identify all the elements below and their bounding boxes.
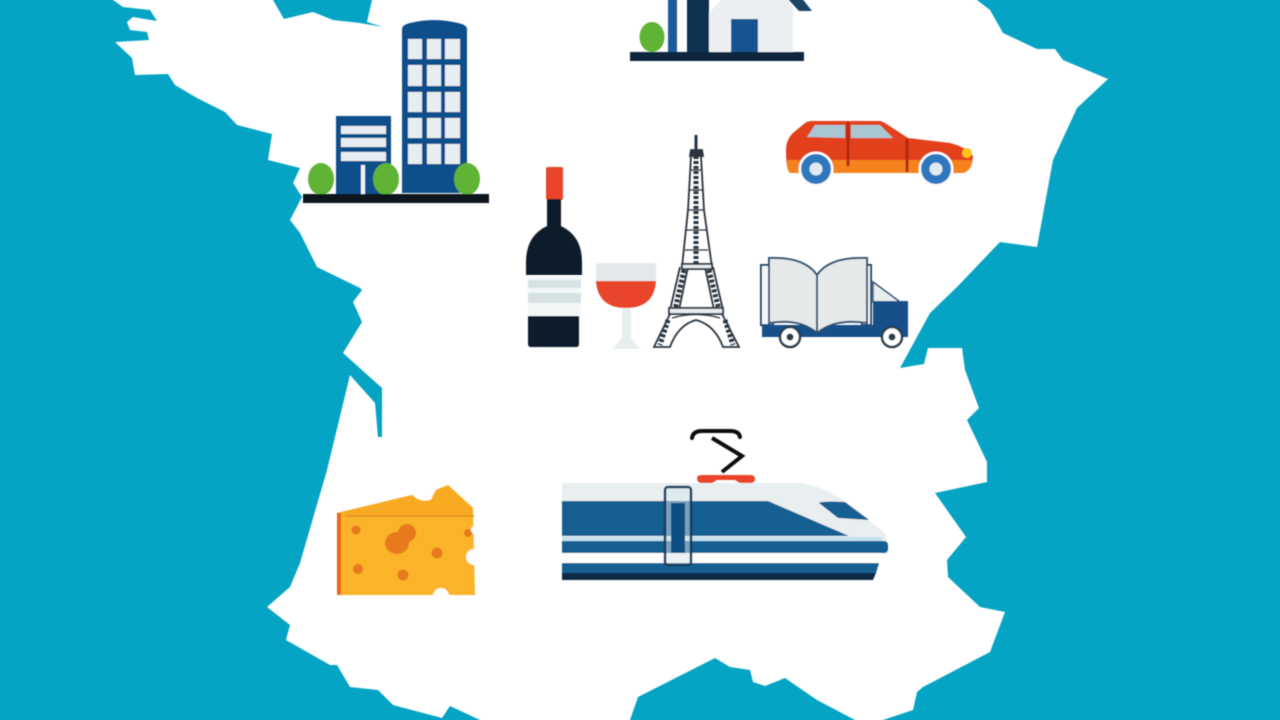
tall tower	[402, 20, 467, 193]
icon: red car	[786, 121, 973, 186]
icon: wine bottle	[526, 167, 582, 347]
icon: office buildings	[303, 20, 489, 203]
short building	[336, 116, 391, 194]
pantograph	[692, 431, 755, 483]
icon: wine glass	[596, 263, 656, 349]
icon: high-speed train	[562, 431, 888, 580]
trees	[308, 163, 480, 195]
icon: book truck	[761, 258, 908, 347]
ground	[303, 194, 489, 203]
icon: cheese	[337, 485, 482, 604]
train door	[665, 487, 691, 565]
map: France outline	[108, 0, 1108, 720]
icon: Eiffel Tower	[654, 135, 739, 347]
icon: house	[630, 0, 812, 61]
